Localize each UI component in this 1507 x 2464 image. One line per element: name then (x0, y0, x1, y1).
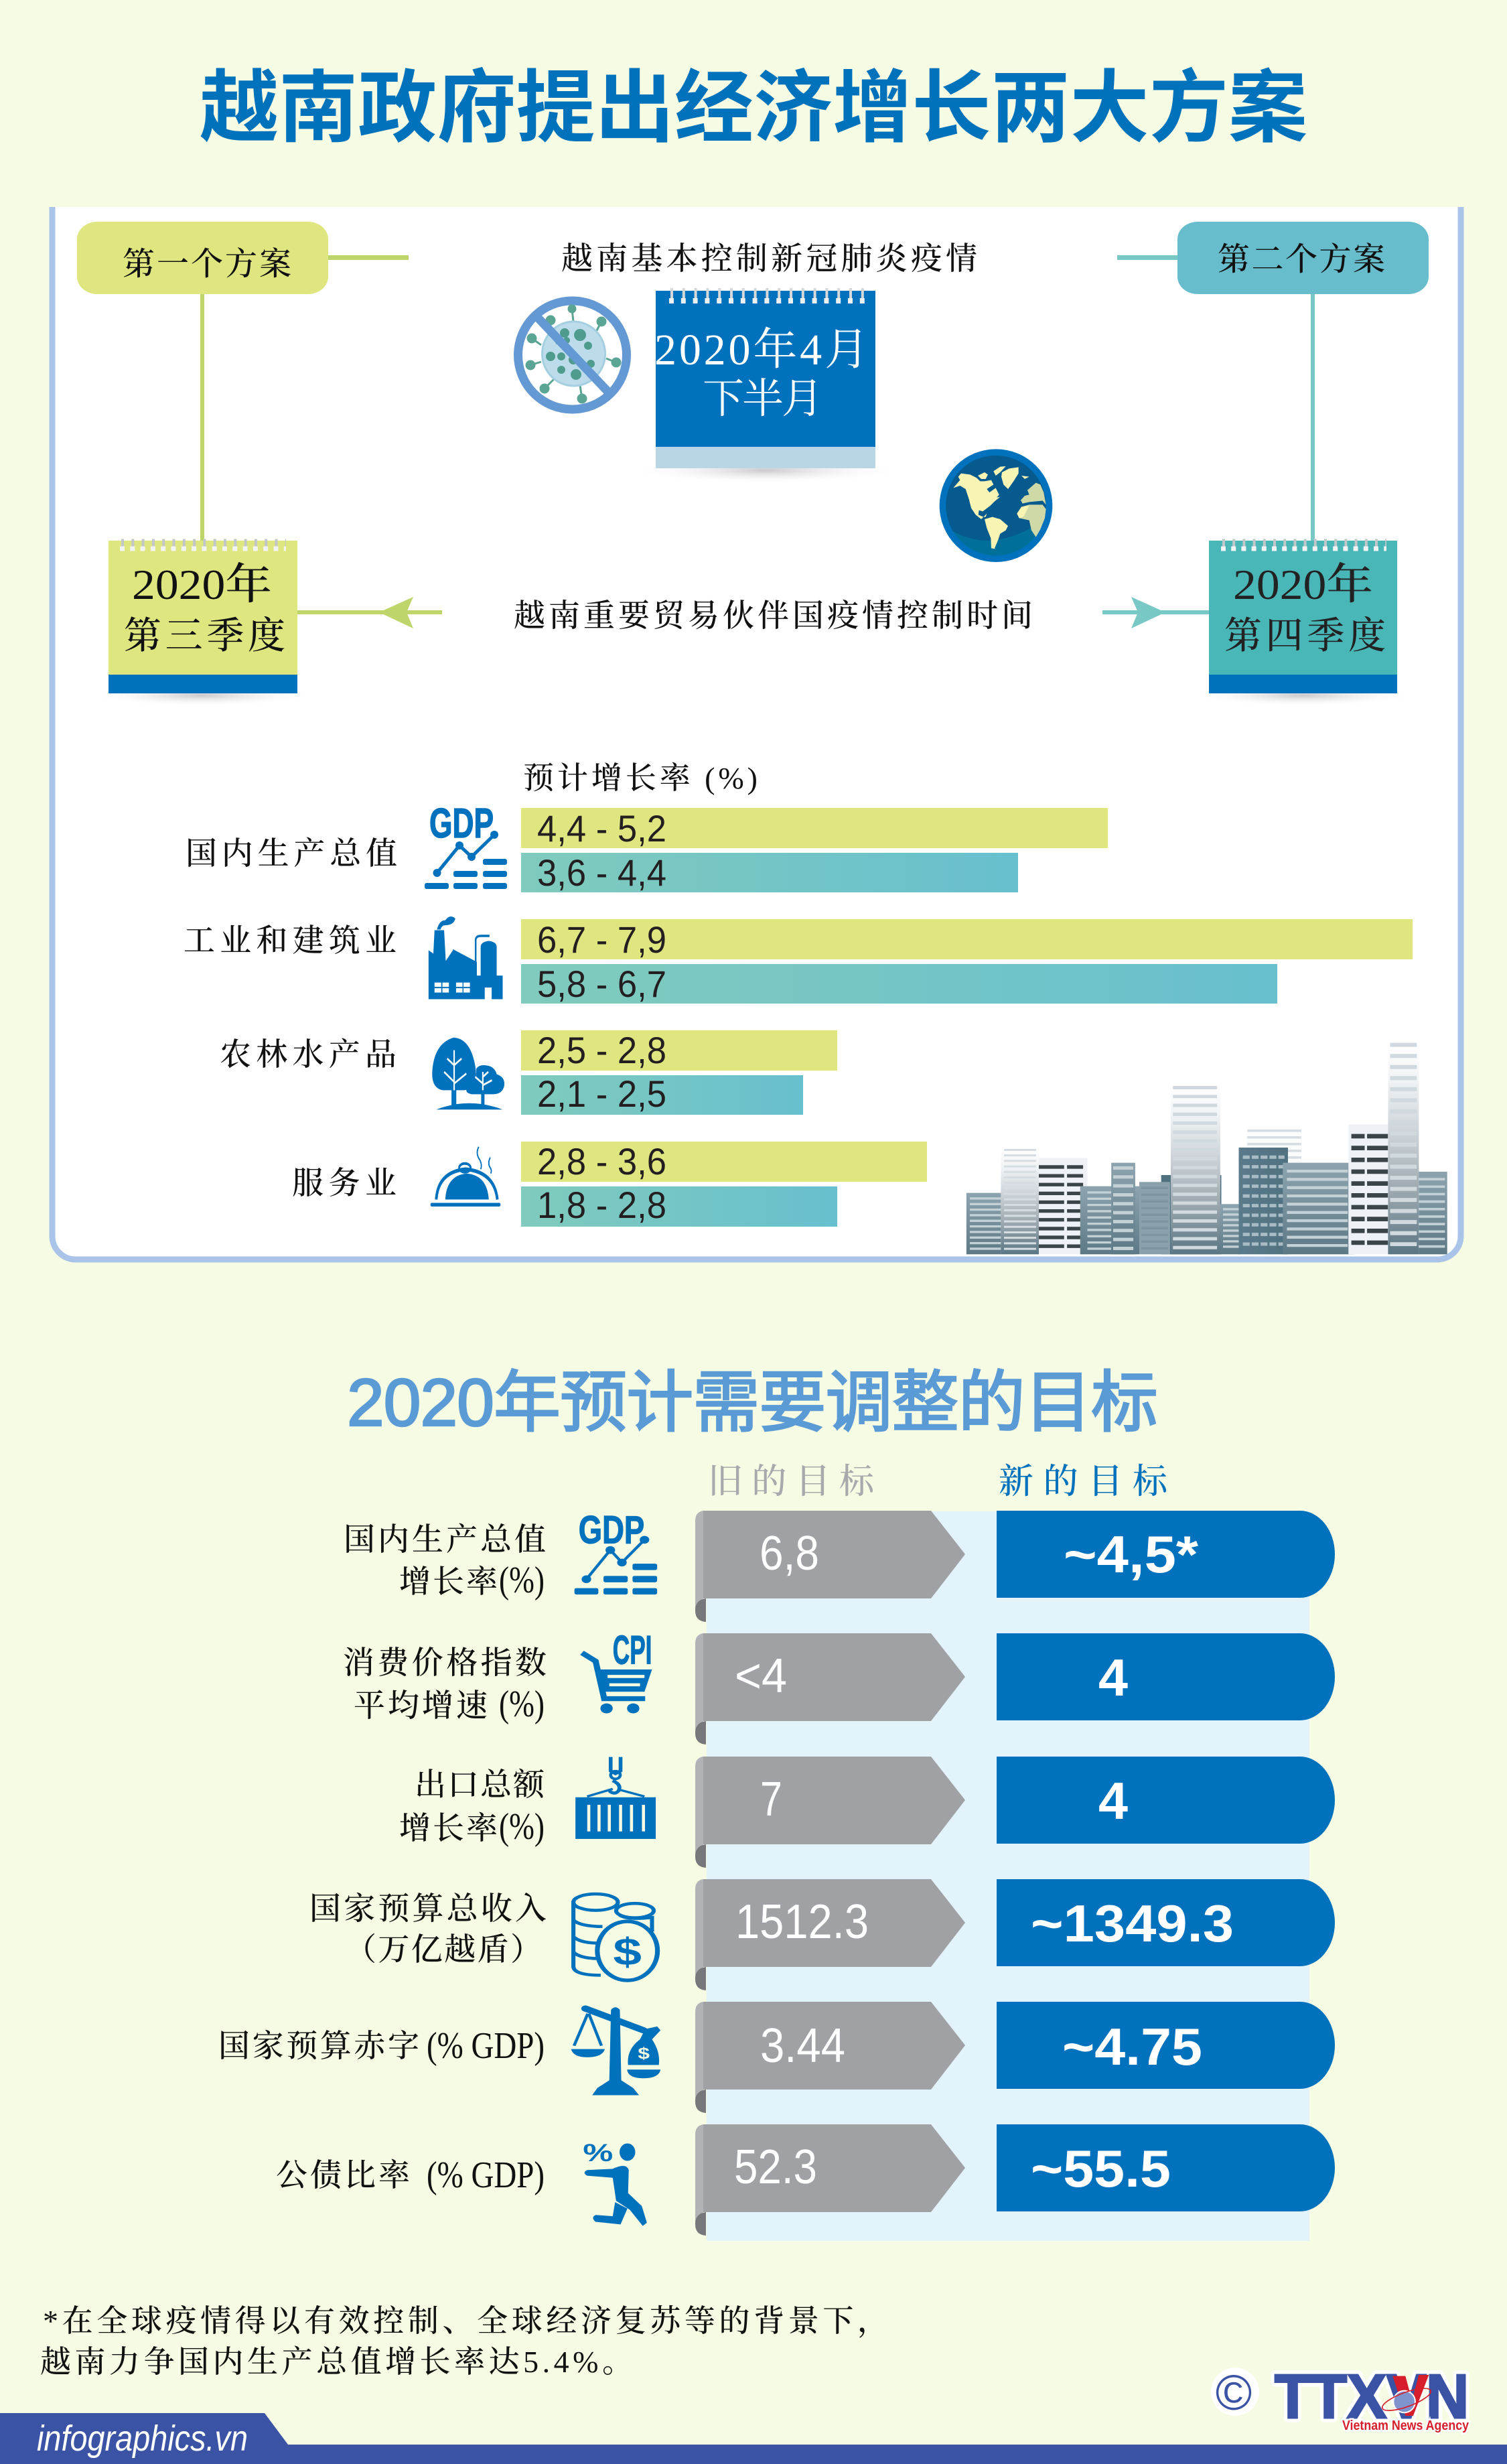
icon: coins: $ (613, 1931, 642, 1974)
calendar: third quarter (88, 541, 315, 706)
footer bar (0, 2413, 1507, 2464)
bar group: industry (521, 918, 1413, 1005)
panel: targets background (707, 1511, 1309, 2241)
icon: scale (571, 2007, 660, 2095)
calendar: fourth quarter: 2020年 (1233, 561, 1373, 608)
icon: globe (940, 449, 1052, 562)
calendar: fourth quarter: 第四季度 (1224, 616, 1386, 657)
new value bar: ~1349.3 (1031, 1894, 1234, 1953)
label: budget deficit: (% GDP) (427, 2025, 545, 2067)
bar group: GDP: 4,4 - 5,2 (537, 807, 666, 849)
footnote (40, 2304, 888, 2379)
bar group: industry: 5,8 - 6,7 (537, 963, 666, 1005)
label: exports (399, 1768, 545, 1848)
label: budget revenue: 国家预算总收入 (309, 1892, 547, 1927)
label: exports: 增长率 (399, 1811, 498, 1846)
label: GDP growth: 增长率 (399, 1565, 498, 1600)
new value bar (997, 1879, 1335, 1966)
logo: copyright TTXVN: TTXVN (1275, 2362, 1469, 2431)
label: public debt: 公债比率 (276, 2159, 410, 2193)
calendar: second half of April 2020: 2020年4月 (654, 326, 869, 374)
illustration: city skyline (966, 1043, 1447, 1254)
section heading: targets to adjust: 2020年预计需要调整的目标 (347, 1365, 1158, 1440)
label: CPI: 消费价格指数 (343, 1646, 547, 1681)
calendar: second half of April 2020 (628, 291, 903, 484)
new value bar (997, 1511, 1335, 1598)
label: CPI: 平均增速 (354, 1689, 488, 1724)
old value bar: 1512.3 (735, 1895, 869, 1949)
icon: trees (432, 1038, 504, 1109)
old value bar (695, 1511, 965, 1622)
column header: old target: 旧的目标 (708, 1463, 875, 1501)
pill: scenario one: 第一个方案 (123, 247, 291, 282)
bar group: GDP: 3,6 - 4,4 (537, 851, 666, 894)
new value bar: 4 (1098, 1648, 1128, 1707)
label: GDP growth: (%) (499, 1560, 545, 1601)
pill: scenario two (1177, 222, 1429, 294)
pill: scenario one (77, 222, 328, 294)
old value bar (695, 2124, 965, 2236)
old value bar (695, 2002, 965, 2113)
calendar: third quarter: 第三季度 (124, 616, 285, 657)
old value bar (695, 1879, 965, 1990)
icon: virus prohibited (518, 301, 627, 409)
text: Vietnam controls epidemic: 越南基本控制新冠肺炎疫情 (561, 242, 977, 277)
row label: services: 服务业 (292, 1166, 397, 1201)
old value bar (695, 1757, 965, 1868)
logo: copyright TTXVN: TTXVN (1275, 2362, 1469, 2431)
calendar: third quarter: 2020年 (132, 561, 272, 608)
label: exports: (%) (499, 1806, 545, 1848)
connector lines scenario two (1102, 255, 1315, 628)
icon: coins (573, 1894, 658, 1980)
bar group: industry: 6,7 - 7,9 (537, 918, 666, 961)
icon: scale: $ (638, 2045, 650, 2062)
bar group: agriculture: 2,5 - 2,8 (537, 1029, 666, 1071)
new value bar: 4 (1098, 1771, 1128, 1830)
bar group: services: 2,8 - 3,6 (537, 1140, 666, 1182)
footnote: 越南力争国内生产总值增长率达5.4%。 (40, 2345, 633, 2379)
icon: factory (429, 916, 503, 1000)
row: exports (399, 1757, 1335, 1868)
old value bar: 7 (760, 1773, 782, 1826)
bar group: agriculture: 2,1 - 2,5 (537, 1073, 666, 1115)
bar group: agriculture (521, 1029, 837, 1115)
icon: container (575, 1757, 656, 1839)
row label: industry and construction: 工业和建筑业 (184, 924, 397, 959)
old value bar: 52.3 (734, 2140, 817, 2194)
new value bar: ~4.75 (1062, 2017, 1202, 2076)
icon: person carrying debt: % (583, 2140, 613, 2167)
logo: copyright TTXVN: Vietnam News Agency (1342, 2418, 1469, 2433)
chart heading: 预计增长率 (%) (523, 761, 758, 795)
footer text: website: infographics.vn (37, 2418, 248, 2459)
column header: new target: 新的目标 (999, 1463, 1169, 1501)
new value bar (997, 1633, 1335, 1720)
row label: agriculture: 农林水产品 (220, 1038, 397, 1073)
icon: GDP (575, 1508, 657, 1594)
row label: GDP: 国内生产总值 (186, 837, 397, 872)
bar group: GDP (521, 807, 1108, 894)
old value bar (695, 1633, 965, 1744)
bar group: services: 1,8 - 2,8 (537, 1184, 666, 1226)
new value bar (997, 2124, 1335, 2211)
connector lines scenario one (200, 255, 442, 628)
label: budget revenue (309, 1892, 547, 1968)
label: CPI (343, 1646, 547, 1725)
label: public debt (276, 2154, 545, 2196)
row: GDP growth (344, 1508, 1335, 1622)
icon: person carrying debt (583, 2140, 647, 2226)
label: GDP growth (344, 1523, 546, 1601)
row: CPI: CPI (613, 1628, 652, 1673)
calendar: second half of April 2020: 下半月 (703, 377, 823, 422)
new value bar (997, 1757, 1335, 1844)
row: budget deficit (218, 2002, 1335, 2113)
old value bar: 6,8 (760, 1527, 819, 1580)
calendar: fourth quarter (1189, 541, 1417, 706)
row: CPI (343, 1628, 1335, 1744)
icon: CPI cart (582, 1628, 652, 1714)
icon: GDP: GDP (579, 1508, 644, 1552)
new value bar: ~4,5* (1064, 1525, 1199, 1584)
text: trade partners control time: 越南重要贸易伙伴国疫情控制时间 (514, 599, 1033, 634)
new value bar: ~55.5 (1031, 2139, 1171, 2198)
panel: two scenarios (52, 207, 1461, 1259)
label: budget deficit (218, 2025, 545, 2067)
row: budget revenue (309, 1879, 1335, 1990)
label: budget deficit: 国家预算赤字 (218, 2029, 419, 2064)
bar chart (521, 807, 1413, 1227)
icon: cloche (431, 1147, 500, 1207)
label: GDP growth: 国内生产总值 (344, 1523, 546, 1558)
footnote: *在全球疫情得以有效控制、全球经济复苏等的背景下， (43, 2304, 888, 2339)
old value bar: 3.44 (760, 2019, 845, 2073)
new value bar (997, 2002, 1335, 2089)
row: public debt (276, 2124, 1335, 2236)
icon: GDP chart: GDP (429, 801, 494, 847)
icon: GDP chart (425, 801, 507, 889)
title: 越南政府提出经济增长两大方案 (200, 64, 1307, 153)
label: CPI: (%) (499, 1684, 545, 1725)
pill: scenario two: 第二个方案 (1218, 242, 1385, 277)
label: exports: 出口总额 (415, 1768, 545, 1803)
old value bar: <4 (735, 1649, 787, 1703)
logo: copyright TTXVN: © (1216, 2365, 1252, 2420)
bar group: services (521, 1140, 927, 1227)
label: budget revenue: （万亿越盾） (345, 1933, 542, 1968)
label: public debt: (% GDP) (427, 2154, 545, 2196)
